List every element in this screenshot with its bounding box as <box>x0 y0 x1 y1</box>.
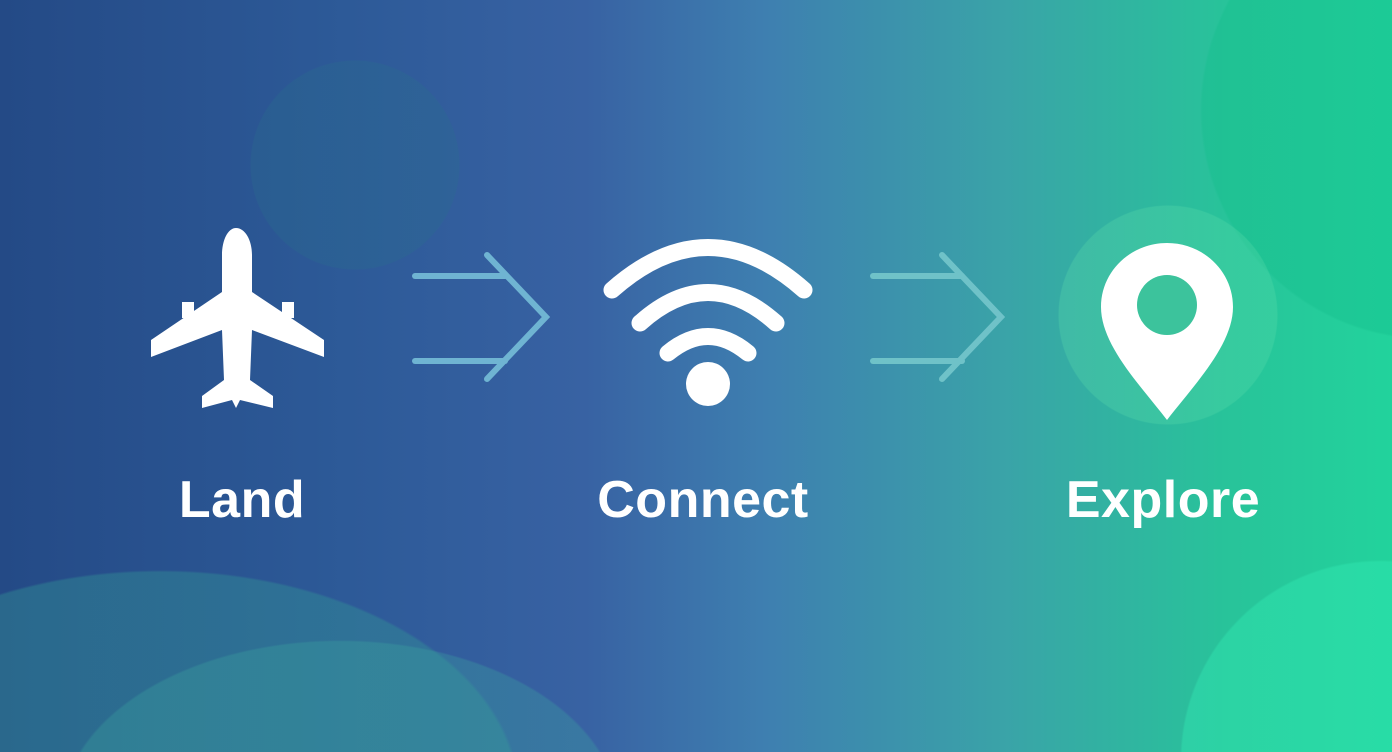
arrow: connect to explore <box>870 252 1005 382</box>
arrow: land to connect <box>412 252 550 382</box>
icon: location pin <box>1101 243 1233 420</box>
label: Explore: Explore <box>1066 471 1260 529</box>
icon: airplane <box>151 228 324 408</box>
icon: wifi <box>604 239 812 406</box>
label: Connect: Connect <box>597 471 809 529</box>
label: Land: Land <box>179 471 305 529</box>
